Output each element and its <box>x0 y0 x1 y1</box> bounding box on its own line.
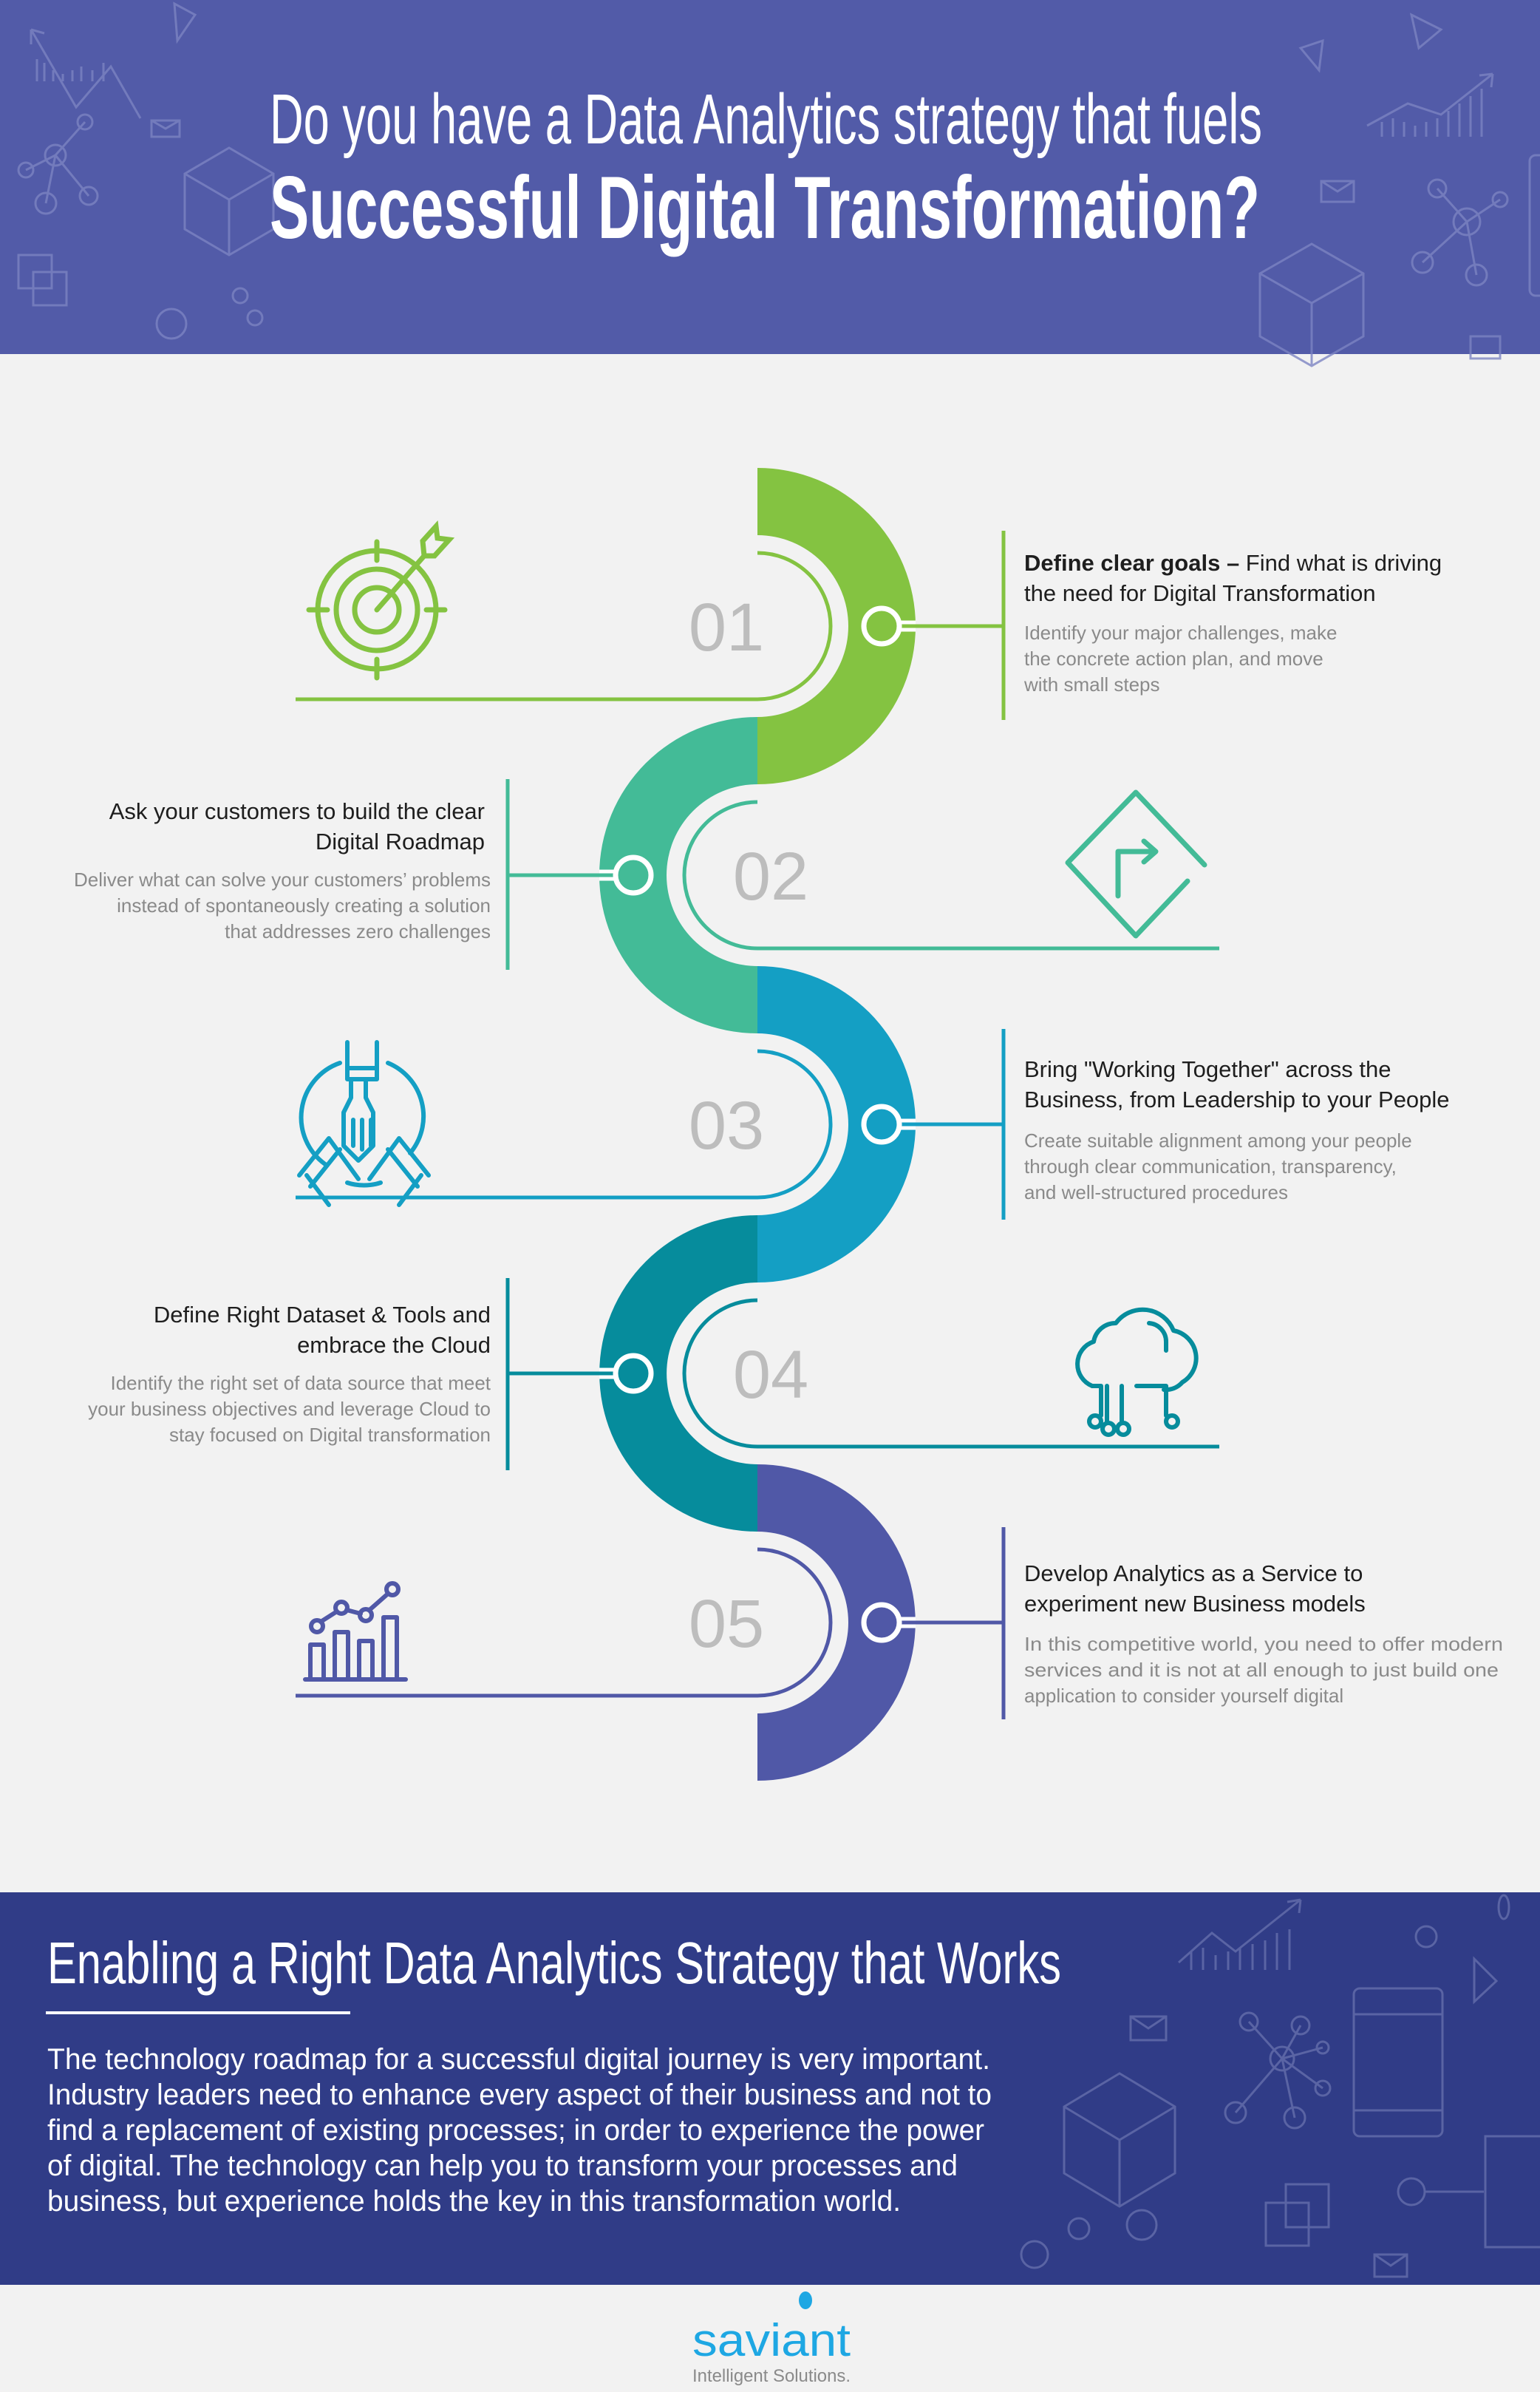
text: step 01 <box>1023 550 1442 696</box>
text: step 05: application to consider yourself digital <box>1024 1685 1343 1707</box>
step 02 <box>74 779 1219 970</box>
text: step 04: Identify the right set of data source that meet <box>110 1372 491 1394</box>
number 01: 01 <box>689 590 764 665</box>
paragraph: strategy: find a replacement of existing processes; in order to experience the power <box>47 2114 984 2147</box>
paragraph: strategy: business, but experience holds the key in this transformation world. <box>47 2185 901 2218</box>
text: step 01: the need for Digital Transformation <box>1024 580 1376 606</box>
band 01 <box>757 468 916 784</box>
text: step 02: Digital Roadmap <box>316 829 485 854</box>
number 05: 05 <box>689 1586 764 1662</box>
text: step 05: Develop Analytics as a Service to <box>1024 1560 1363 1586</box>
text: step 01: with small steps <box>1023 673 1160 696</box>
text: step 04 <box>88 1302 491 1446</box>
paragraph: strategy: Industry leaders need to enhance every aspect of their business and not to <box>47 2079 992 2111</box>
text: step 04: embrace the Cloud <box>297 1332 491 1358</box>
text: step 03: and well-structured procedures <box>1024 1181 1288 1203</box>
step 03 <box>296 1029 1450 1220</box>
text: step 04: your business objectives and leverage Cloud to <box>88 1398 491 1420</box>
text: step 03: Business, from Leadership to your People <box>1024 1087 1450 1112</box>
snake timeline <box>599 468 916 1781</box>
text: step 04: Define Right Dataset & Tools and <box>154 1302 491 1328</box>
text: step 01: the concrete action plan, and move <box>1024 648 1323 670</box>
step 04 <box>88 1278 1219 1470</box>
icon: cloud circuit <box>1077 1310 1196 1435</box>
band 03 <box>757 966 916 1282</box>
icon: bar chart <box>305 1583 406 1679</box>
footer logo <box>692 2291 851 2386</box>
paragraph: strategy: The technology roadmap for a successful digital journey is very important. <box>47 2043 990 2076</box>
step 01 <box>296 526 1442 720</box>
text: step 05: In this competitive world, you need to offer modern <box>1024 1633 1503 1655</box>
text: step 05: experiment new Business models <box>1024 1591 1366 1617</box>
footer logo: Intelligent Solutions. <box>692 2366 851 2386</box>
paragraph: strategy: of digital. The technology can help you to transform your processes and <box>47 2150 958 2182</box>
band 05 <box>757 1464 916 1781</box>
icon: direction diamond <box>1068 792 1205 936</box>
text: step 03: through clear communication, transparency, <box>1024 1155 1397 1178</box>
number 02: 02 <box>733 839 808 914</box>
band 04 <box>599 1215 757 1532</box>
icon: joined hands <box>299 1042 429 1205</box>
paragraph: strategy <box>47 2043 992 2218</box>
text: step 05 <box>1024 1560 1503 1707</box>
text: step 05: services and it is not at all enough to just build one <box>1024 1659 1499 1681</box>
text: step 01: Define clear goals – Find what is driving <box>1024 550 1442 576</box>
text: step 03 <box>1024 1056 1450 1203</box>
heading: strategy: Enabling a Right Data Analytics Strategy that Works <box>47 1930 1061 1996</box>
bottom panel: strategy <box>0 1892 1540 2285</box>
number 04: 04 <box>733 1337 808 1413</box>
text: step 03: Create suitable alignment among your people <box>1024 1129 1412 1152</box>
text: step 02: Deliver what can solve your customers’ problems <box>74 869 491 891</box>
step 05 <box>296 1527 1503 1719</box>
text: step 02: that addresses zero challenges <box>225 920 491 942</box>
text: step 02: Ask your customers to build the clear <box>109 798 485 824</box>
footer logo: saviant <box>692 2315 851 2366</box>
icon: target <box>309 526 449 678</box>
header band <box>0 0 1540 366</box>
text: step 03: Bring "Working Together" across the <box>1024 1056 1391 1082</box>
number 03: 03 <box>689 1088 764 1163</box>
text: step 04: stay focused on Digital transformation <box>169 1424 491 1446</box>
text: step 01: Identify your major challenges, make <box>1024 622 1337 644</box>
text: step 02 <box>74 798 491 942</box>
text: step 02: instead of spontaneously creating a solution <box>117 894 491 917</box>
band 02 <box>599 717 757 1033</box>
